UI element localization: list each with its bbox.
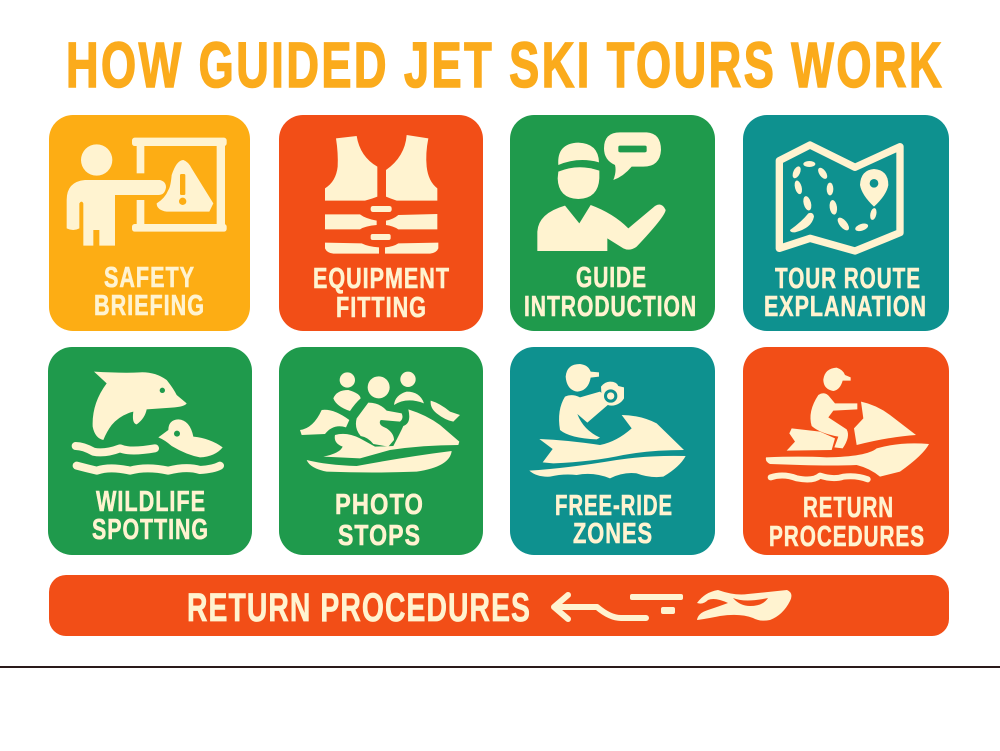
icon: return arrow and jet ski bbox=[554, 590, 791, 621]
icon: guide with speech bubble bbox=[537, 132, 666, 251]
label: equipment fitting bbox=[313, 263, 450, 324]
label: wildlife spotting: SPOTTING bbox=[92, 514, 209, 546]
banner text: RETURN PROCEDURES bbox=[187, 586, 531, 630]
panel: return procedures bbox=[743, 347, 949, 555]
label: free-ride zones: FREE-RIDE bbox=[555, 490, 673, 522]
label: return procedures: RETURN bbox=[803, 492, 894, 524]
banner: return procedures bbox=[49, 575, 949, 636]
icon: dolphins and waves bbox=[76, 372, 223, 471]
label: tour route explanation bbox=[764, 263, 927, 323]
panel: safety briefing bbox=[49, 115, 250, 331]
label: safety briefing: BRIEFING bbox=[94, 290, 205, 322]
panel: tour route explanation bbox=[743, 115, 949, 331]
panel: equipment fitting bbox=[279, 115, 483, 331]
icon: rider with camera on jet ski bbox=[529, 364, 686, 478]
label: free-ride zones: ZONES bbox=[573, 518, 653, 550]
label: equipment fitting: EQUIPMENT bbox=[313, 263, 450, 295]
icon: group on jet ski bbox=[300, 372, 460, 472]
panel: wildlife spotting bbox=[48, 347, 252, 555]
label: wildlife spotting: WILDLIFE bbox=[96, 486, 206, 518]
label: free-ride zones bbox=[555, 490, 673, 550]
label: guide introduction bbox=[524, 262, 697, 323]
label: guide introduction: INTRODUCTION bbox=[524, 291, 697, 323]
label: tour route explanation: EXPLANATION bbox=[764, 291, 927, 323]
label: tour route explanation: TOUR ROUTE bbox=[775, 263, 921, 295]
panel: free-ride zones bbox=[510, 347, 715, 555]
label: wildlife spotting bbox=[92, 486, 209, 546]
label: photo stops bbox=[335, 489, 424, 552]
icon: rider on jet ski returning bbox=[766, 368, 929, 480]
panel: guide introduction bbox=[510, 115, 715, 331]
label: safety briefing bbox=[94, 262, 205, 322]
panel: photo stops bbox=[279, 347, 483, 555]
icon: life vest bbox=[325, 135, 438, 254]
label: equipment fitting: FITTING bbox=[336, 292, 427, 324]
label: guide introduction: GUIDE bbox=[576, 262, 647, 294]
label: photo stops: STOPS bbox=[338, 520, 421, 552]
label: photo stops: PHOTO bbox=[335, 489, 424, 521]
label: safety briefing: SAFETY bbox=[104, 262, 195, 294]
icon: instructor pointing at warning board bbox=[67, 138, 227, 246]
label: return procedures: PROCEDURES bbox=[769, 521, 925, 553]
label: return procedures bbox=[769, 492, 925, 553]
icon: folded map with route and pin bbox=[779, 145, 900, 251]
